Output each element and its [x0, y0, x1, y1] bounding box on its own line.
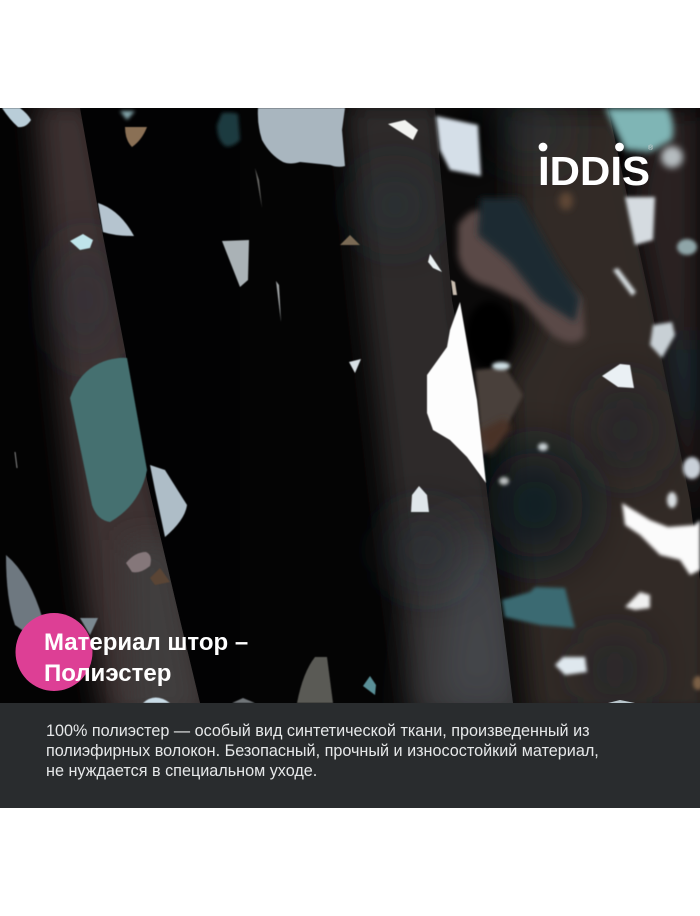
- description text: полиэфирных волокон. Безопасный, прочный и износостойкий материал,: [46, 742, 599, 760]
- photo: polyester curtain with terrazzo print: [0, 108, 700, 703]
- description text: 100% полиэстер — особый вид синтетической ткани, произведенный из: [46, 722, 590, 740]
- heading: Полиэстер: [44, 660, 171, 687]
- logo: IDDIS: IDDIS: [538, 148, 650, 194]
- terrazzo spots, left: [2, 108, 345, 703]
- blurred brown S-shaped shape: [458, 210, 585, 342]
- curtain fold 4 far right: [630, 108, 700, 540]
- terrazzo spots, right (out of focus): [436, 108, 700, 703]
- terrazzo spots, center: [340, 120, 486, 695]
- description text: не нуждается в специальном уходе.: [46, 762, 317, 780]
- pink circle accent: [16, 613, 92, 691]
- blurred dark teal shape: [478, 198, 580, 322]
- curtain fold 1: [22, 108, 200, 703]
- logo: IDDIS: ®: [648, 144, 654, 152]
- heading: [44, 629, 248, 687]
- description band: [0, 703, 700, 808]
- heading: Материал штор –: [44, 629, 248, 656]
- description text: [46, 722, 599, 780]
- curtain fold 3: [435, 108, 700, 720]
- blurred brown blob: [475, 367, 523, 455]
- curtain fold 2 center: [336, 108, 513, 703]
